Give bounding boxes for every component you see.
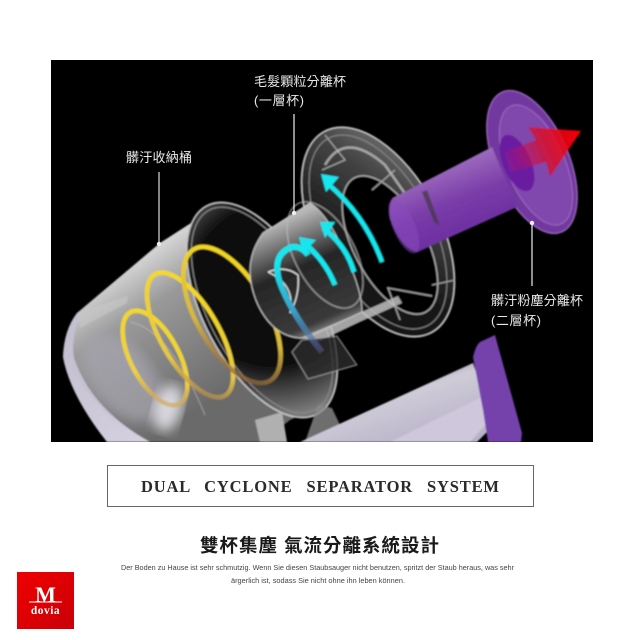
cyan airflow arrows [277, 174, 382, 352]
german body text [121, 563, 515, 585]
label: dust separator: (二層杯) [491, 313, 541, 328]
german body text: Der Boden zu Hause ist sehr schmutzig. Wenn Sie diesen Staubsauger nicht benutzen, spritzt der Staub heraus, was sehr [121, 563, 515, 572]
label: hair separator [254, 74, 346, 215]
label: dust bin: 髒汙收納桶 [126, 150, 192, 165]
purple handle [473, 335, 522, 442]
lid base [300, 363, 490, 442]
label: dust bin [126, 150, 192, 246]
inner hair separator cup [250, 190, 402, 379]
english title box [108, 466, 534, 506]
dust bin body [62, 200, 340, 442]
label: hair separator: 毛髮顆粒分離杯 [254, 74, 346, 89]
english title box: DUAL CYCLONE SEPARATOR SYSTEM [141, 477, 499, 496]
panel: product photo [51, 60, 596, 442]
label: dust separator: 髒汙粉塵分離杯 [491, 293, 583, 308]
logo: M [35, 582, 56, 607]
red arrow [505, 127, 581, 177]
large ring flange [300, 125, 456, 339]
logo [17, 572, 74, 629]
german body text: ärgerlich ist, sodass Sie nicht ohne ihn leben können. [231, 576, 405, 585]
chinese heading: 雙杯集塵 氣流分離系統設計 [200, 535, 439, 556]
label: dust separator [491, 221, 583, 328]
logo: dovia [31, 605, 60, 617]
label: hair separator: (一層杯) [254, 93, 304, 108]
purple filter separator [388, 88, 579, 254]
yellow airflow rings [120, 243, 284, 408]
